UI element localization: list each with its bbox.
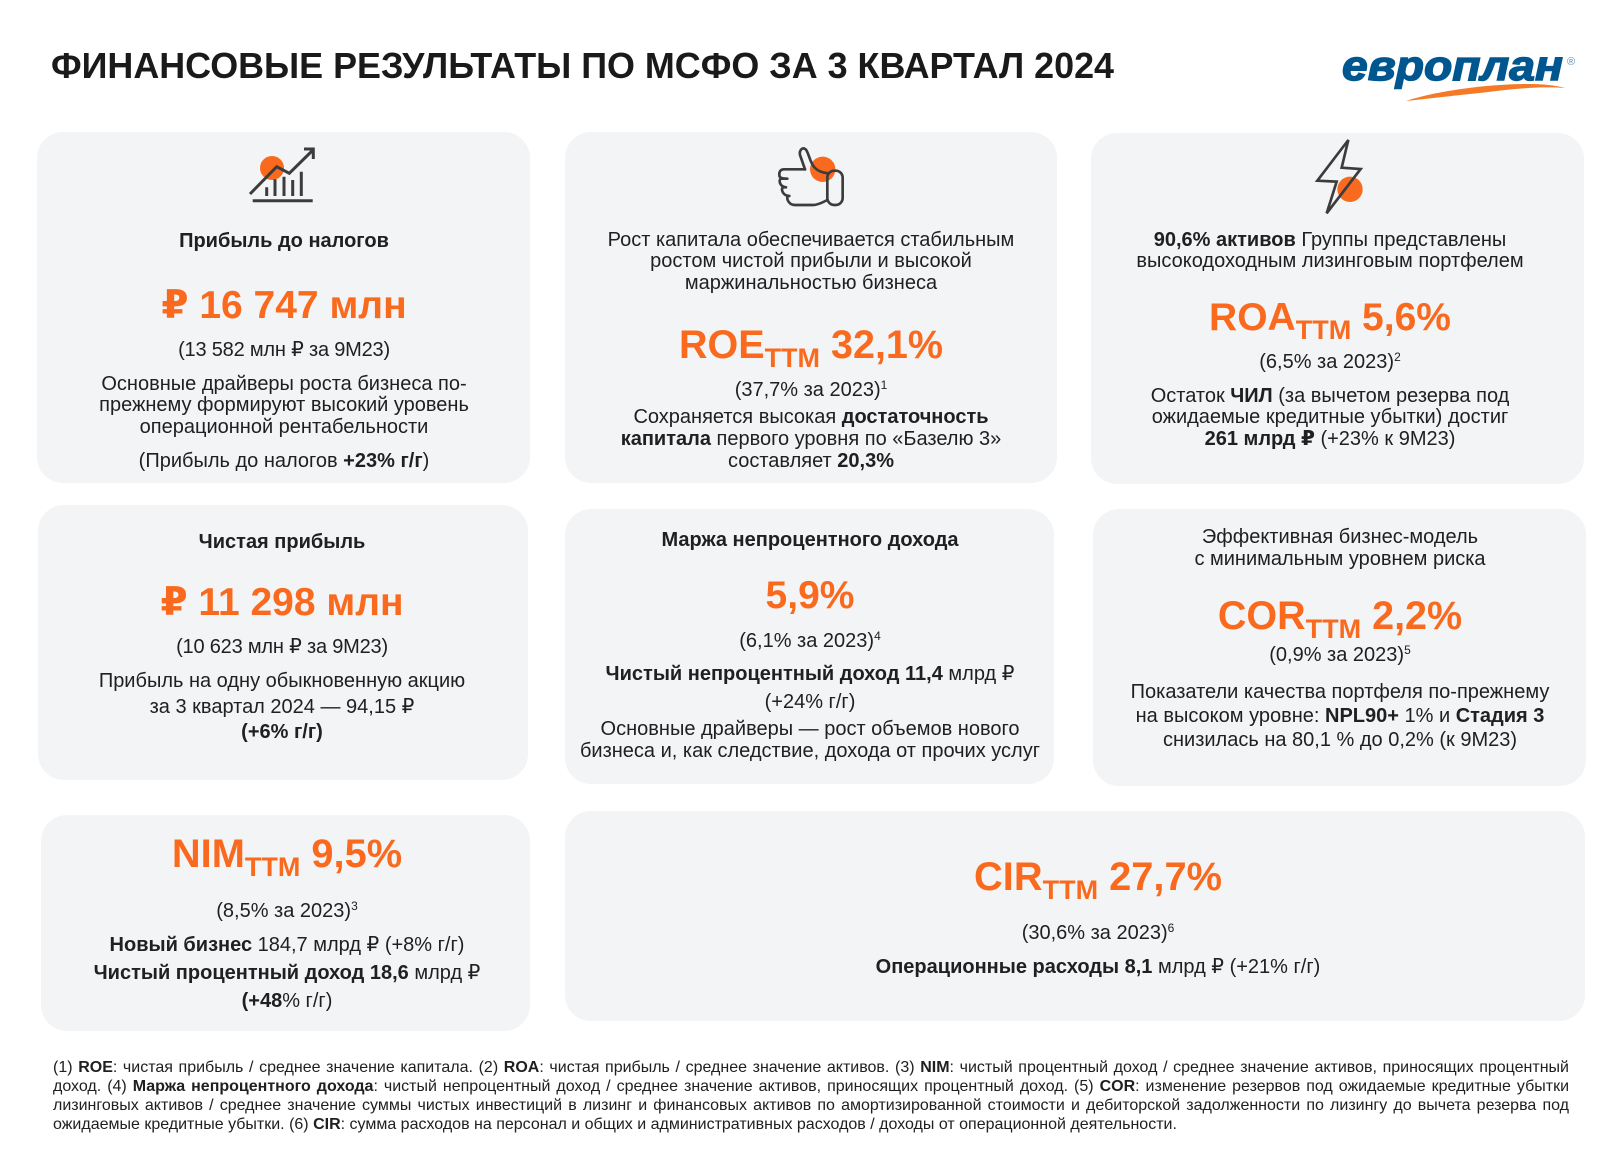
text: ростом чистой прибыли и высокой bbox=[650, 250, 972, 272]
description bbox=[621, 406, 1001, 472]
text bbox=[1136, 229, 1524, 272]
comparison: (6,5% за 2023)2 bbox=[1259, 350, 1401, 373]
description: ожидаемые кредитные убытки) достиг bbox=[1152, 406, 1508, 428]
icon: growth chart bbox=[249, 148, 315, 202]
text: Рост капитала обеспечивается стабильным bbox=[608, 229, 1014, 251]
income bbox=[606, 663, 1014, 712]
metric: ROATTM 5,6% bbox=[1209, 296, 1451, 345]
text: 90,6% активов Группы представлены bbox=[1154, 229, 1506, 251]
metric: ₽ 11 298 млн bbox=[160, 581, 404, 624]
panel: ROE bbox=[565, 132, 1057, 483]
description: снизилась на 80,1 % до 0,2% (к 9М23) bbox=[1163, 728, 1517, 750]
footnotes: (1) ROE: чистая прибыль / среднее значение капитала. (2) ROA: чистая прибыль / среднее значение активов. (3) NIM: чистый процентный доход / среднее значение активов, приносящих процентный bbox=[53, 1059, 1569, 1076]
metric: CIRTTM 27,7% bbox=[974, 855, 1222, 905]
metric: NIMTTM 9,5% bbox=[172, 832, 402, 882]
footnotes bbox=[53, 1059, 1569, 1133]
metric: ₽ 16 747 млн bbox=[161, 284, 407, 327]
panel: маржа непроцентного дохода bbox=[565, 509, 1054, 784]
description: капитала первого уровня по «Базелю 3» bbox=[621, 428, 1001, 450]
comparison: (30,6% за 2023)6 bbox=[1022, 921, 1174, 944]
comparison: (6,1% за 2023)4 bbox=[739, 629, 881, 652]
metric: ROETTM 32,1% bbox=[679, 323, 943, 373]
growth note: (Прибыль до налогов +23% г/г) bbox=[139, 450, 429, 472]
logo: европлан bbox=[1342, 42, 1575, 101]
logo: европлан: ® bbox=[1567, 56, 1575, 68]
description: Остаток ЧИЛ (за вычетом резерва под bbox=[1151, 385, 1509, 407]
text bbox=[1194, 526, 1486, 570]
description bbox=[1151, 385, 1509, 450]
text bbox=[608, 229, 1014, 294]
description bbox=[1131, 680, 1550, 750]
panel: NIM bbox=[41, 815, 530, 1031]
description: Новый бизнес 184,7 млрд ₽ (+8% г/г) bbox=[110, 934, 464, 956]
description: Операционные расходы 8,1 млрд ₽ (+21% г/г) bbox=[876, 956, 1320, 978]
description: Основные драйверы роста бизнеса по- bbox=[101, 373, 467, 395]
footnotes: лизинговых активов / среднее значение суммы чистых инвестиций в лизинг и финансовых активов по амортизированной стоимости и дебиторской задолженности по лизингу до вычета резерва под bbox=[53, 1097, 1569, 1114]
comparison: (8,5% за 2023)3 bbox=[216, 899, 358, 922]
description: Чистый процентный доход 18,6 млрд ₽ bbox=[94, 962, 480, 984]
description: на высоком уровне: NPL90+ 1% и Стадия 3 bbox=[1136, 704, 1544, 726]
description bbox=[94, 934, 480, 1012]
description: Показатели качества портфеля по-прежнему bbox=[1131, 680, 1549, 702]
comparison: (0,9% за 2023)5 bbox=[1269, 643, 1411, 666]
comparison: (10 623 млн ₽ за 9М23) bbox=[176, 636, 388, 658]
description bbox=[99, 670, 465, 743]
text: с минимальным уровнем риска bbox=[1194, 548, 1486, 570]
metric: 5,9% bbox=[766, 574, 854, 617]
description: за 3 квартал 2024 — 94,15 ₽ bbox=[150, 696, 414, 718]
text: Эффективная бизнес-модель bbox=[1202, 526, 1478, 548]
comparison: (37,7% за 2023)1 bbox=[735, 378, 887, 401]
description: прежнему формируют высокий уровень bbox=[99, 394, 469, 416]
comparison: (13 582 млн ₽ за 9М23) bbox=[178, 339, 390, 361]
panel: чистая прибыль bbox=[38, 505, 528, 780]
text: маржинальностью бизнеса bbox=[685, 272, 937, 294]
panel: прибыль до налогов bbox=[37, 132, 530, 483]
description: Основные драйверы — рост объемов нового bbox=[601, 718, 1019, 740]
metric: CORTTM 2,2% bbox=[1218, 594, 1462, 644]
description: операционной рентабельности bbox=[140, 416, 428, 438]
description: 261 млрд ₽ (+23% к 9М23) bbox=[1205, 428, 1455, 450]
footnotes: доход. (4) Маржа непроцентного дохода: чистый непроцентный доход / среднее значение активов, приносящих процентный доход. (5) COR: изменение резервов под ожидаемые кредитные убытки bbox=[53, 1078, 1569, 1095]
text: высокодоходным лизинговым портфелем bbox=[1136, 250, 1524, 272]
heading: Чистая прибыль bbox=[199, 531, 365, 553]
heading: Прибыль до налогов bbox=[179, 230, 389, 252]
description: (+48% г/г) bbox=[242, 990, 332, 1012]
icon: thumbs up bbox=[778, 147, 844, 206]
logo: европлан: европлан bbox=[1342, 42, 1563, 89]
description: бизнеса и, как следствие, дохода от прочих услуг bbox=[580, 740, 1040, 762]
description: Сохраняется высокая достаточность bbox=[633, 406, 989, 428]
description: составляет 20,3% bbox=[728, 450, 894, 472]
description: Прибыль на одну обыкновенную акцию bbox=[99, 670, 465, 692]
panel: ROA bbox=[1091, 133, 1584, 484]
description bbox=[99, 373, 469, 438]
icon: lightning bbox=[1314, 139, 1364, 214]
heading: Маржа непроцентного дохода bbox=[661, 529, 959, 551]
description: (+6% г/г) bbox=[241, 721, 323, 743]
income: (+24% г/г) bbox=[765, 690, 855, 712]
income: Чистый непроцентный доход 11,4 млрд ₽ bbox=[606, 663, 1014, 685]
description bbox=[580, 718, 1040, 762]
panel: CIR bbox=[565, 811, 1585, 1021]
title: ФИНАНСОВЫЕ РЕЗУЛЬТАТЫ ПО МСФО ЗА 3 КВАРТАЛ 2024 bbox=[51, 46, 1114, 86]
footnotes: ожидаемые кредитные убытки. (6) CIR: сумма расходов на персонал и общих и административных расходов / доходы от операционной деятельности. bbox=[53, 1116, 1177, 1133]
panel: COR bbox=[1093, 509, 1586, 786]
